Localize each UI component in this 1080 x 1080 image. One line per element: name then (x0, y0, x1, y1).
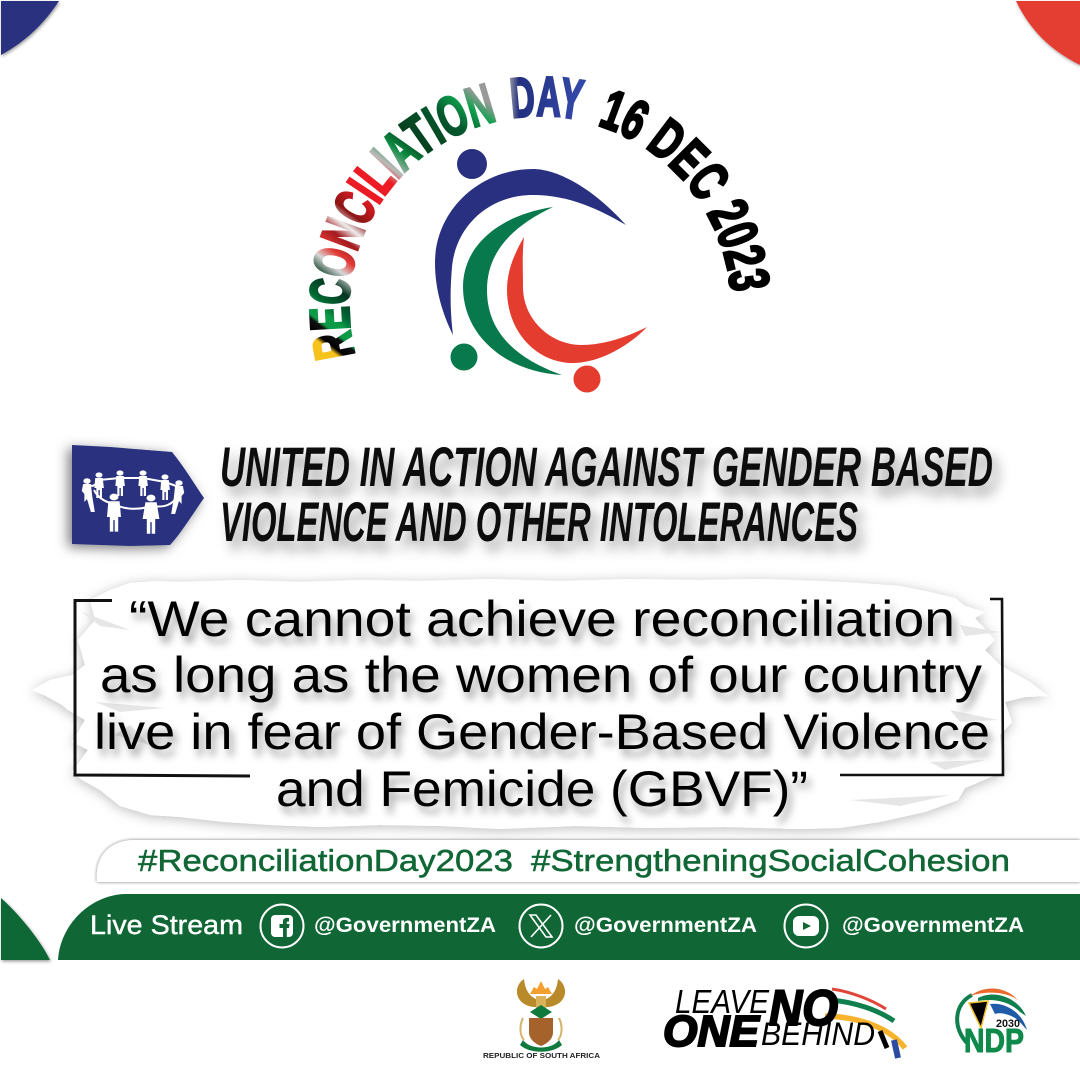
logo: NDP 2030 (957, 989, 1027, 1059)
NDP green arc (978, 994, 1026, 1016)
logo: coat of arms (517, 979, 565, 1052)
quote line 1: “We cannot achieve reconciliation (129, 591, 955, 647)
quote text (94, 591, 990, 817)
footer band shape (58, 894, 1080, 960)
badge: children holding hands (72, 445, 204, 546)
logo: green figure (450, 207, 562, 375)
logo: red figure (507, 237, 647, 392)
2030: 2030 (996, 1018, 1020, 1030)
shield (529, 1018, 553, 1046)
quote frame (75, 599, 1003, 776)
curved title: Reconciliation: RECONCILIATION (308, 82, 496, 361)
logo: leave no one behind (663, 980, 905, 1058)
quote line 4: and Femicide (GBVF)” (276, 761, 808, 817)
icon: circle of children (82, 470, 184, 534)
behind: BEHIND (761, 1016, 875, 1052)
wreath (520, 1018, 562, 1040)
logo stripes (825, 989, 905, 1058)
event logo with curved title (308, 76, 770, 392)
curved title: date: 16 DEC 2023 (598, 90, 770, 292)
motto ribbon (520, 1040, 562, 1052)
hashtag bar (97, 840, 1080, 882)
footer band: social media (58, 894, 1080, 960)
icon: X (520, 904, 562, 948)
logo: blue figure (435, 149, 626, 335)
handle: youtube: @GovernmentZA (842, 914, 1024, 937)
icon: youtube (784, 904, 828, 948)
live stream label: Live Stream (90, 910, 243, 940)
panel: torn paper brush stroke (32, 579, 1048, 829)
curved title: Day: DAY (510, 76, 586, 120)
coat of arms caption: REPUBLIC OF SOUTH AFRICA (483, 1051, 601, 1060)
icon: facebook (260, 904, 304, 948)
NDP ring (957, 995, 972, 1044)
handle: X: @GovernmentZA (574, 914, 757, 937)
corner: blue top left (1, 1, 59, 55)
corner: red top right (1016, 1, 1080, 65)
NDP blue arc (990, 1004, 1027, 1030)
corner: green bottom left (1, 898, 50, 960)
NDP: NDP (964, 1022, 1024, 1059)
paper streaks (82, 612, 1000, 806)
eagle head (536, 996, 546, 1008)
no: NO (769, 980, 838, 1036)
sun (530, 981, 552, 994)
eagle wings (517, 979, 565, 1007)
hashtag: social cohesion: #StrengtheningSocialCohesion (531, 843, 1010, 878)
leave: LEAVE (675, 983, 770, 1020)
quote line 2: as long as the women of our country (100, 647, 982, 703)
handle: facebook: @GovernmentZA (314, 914, 496, 937)
badge shape (72, 445, 204, 546)
NDP orange arc (970, 989, 1018, 1000)
NDP black and yellow triangle (969, 1001, 988, 1028)
hashtag: reconciliation day: #ReconciliationDay2023 (138, 843, 513, 878)
quote line 3: live in fear of Gender-Based Violence (94, 704, 990, 760)
green crest (530, 1005, 552, 1019)
one: ONE (663, 1007, 761, 1056)
hashtag bar shape (97, 840, 1080, 882)
